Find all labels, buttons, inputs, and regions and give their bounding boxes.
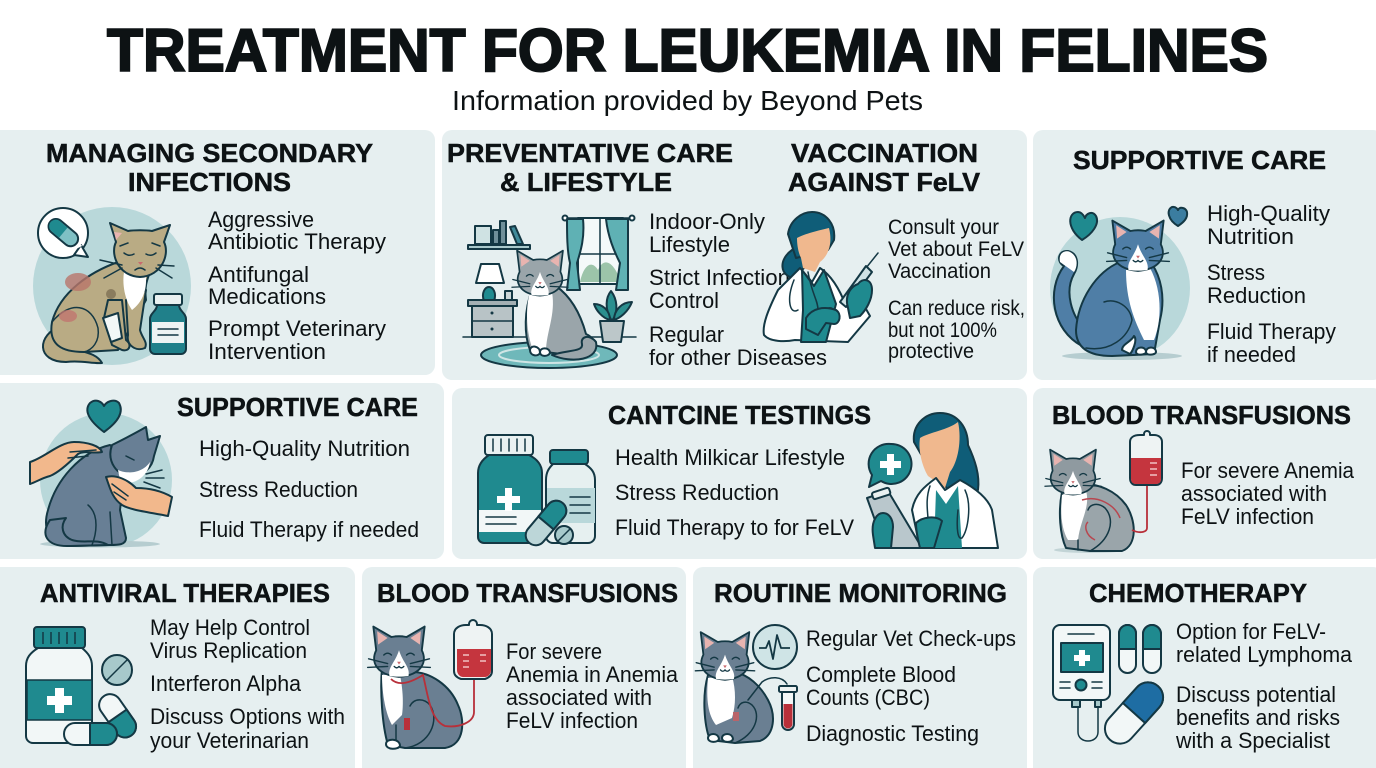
list: managing infection measures: Medications	[208, 284, 326, 309]
list: supportive care	[199, 436, 419, 542]
panel: antiviral therapies	[0, 567, 355, 768]
heading: managing secondary infections: MANAGING SECONDARY	[46, 138, 373, 168]
text: transfusion note: associated with	[506, 685, 652, 710]
illustration: indoor room with cat	[463, 216, 636, 368]
list: testing items: Fluid Therapy to for FeLV	[615, 515, 854, 540]
list: lifestyle measures: Strict Infection	[649, 265, 790, 290]
list: lifestyle measures: for other Diseases	[649, 345, 827, 370]
panel: routine monitoring	[693, 567, 1027, 768]
list: supportive care: High-Quality Nutrition	[199, 436, 410, 461]
heading: managing secondary infections: INFECTIONS	[128, 167, 291, 197]
panel: chemotherapy	[1033, 567, 1376, 768]
text: blood transfusion note: FeLV infection	[1181, 504, 1314, 529]
illustration: cat with monitor and test tube	[695, 625, 797, 743]
list: monitoring items: Diagnostic Testing	[806, 721, 979, 746]
list: antiviral notes: Discuss Options with	[150, 704, 345, 729]
illustration: cat with blood bag	[368, 620, 492, 749]
title: TREATMENT FOR LEUKEMIA IN FELINES	[107, 17, 1268, 84]
text: transfusion note: For severe	[506, 639, 602, 664]
list: managing infection measures: Antibiotic Therapy	[208, 229, 386, 254]
list: managing infection measures: Intervention	[208, 339, 326, 364]
heading: vaccination against FeLV: AGAINST FeLV	[788, 167, 981, 197]
list: chemotherapy notes: benefits and risks	[1176, 705, 1340, 730]
list: managing infection measures	[208, 207, 386, 364]
illustration: infusion pump and capsules	[1053, 625, 1169, 750]
list: chemotherapy notes: Discuss potential	[1176, 682, 1336, 707]
heading: chemotherapy: CHEMOTHERAPY	[1089, 578, 1307, 608]
list: testing items: Health Milkicar Lifestyle	[615, 445, 845, 470]
illustration: vet with syringe	[764, 212, 878, 342]
illustration: cat being petted	[30, 401, 172, 548]
list: monitoring items: Counts (CBC)	[806, 685, 930, 710]
list: monitoring items	[806, 626, 1016, 746]
list: chemotherapy notes: with a Specialist	[1175, 728, 1330, 753]
list: supportive care: High-Quality	[1207, 201, 1330, 226]
panel: cantcine testings	[452, 388, 1027, 559]
list: managing infection measures: Prompt Veterinary	[208, 316, 386, 341]
heading: routine monitoring: ROUTINE MONITORING	[714, 578, 1007, 608]
list: chemotherapy notes	[1175, 619, 1353, 753]
list: lifestyle measures	[649, 209, 827, 370]
list: managing infection measures: Antifungal	[208, 262, 309, 287]
list: lifestyle measures: Lifestyle	[649, 232, 730, 257]
subtitle: Information provided by Beyond Pets	[452, 85, 923, 116]
text: transfusion note	[506, 639, 679, 733]
list: supportive care: Nutrition	[1207, 224, 1294, 249]
panel: managing secondary infections	[0, 130, 435, 375]
list: supportive care: Reduction	[1207, 283, 1306, 308]
list: vaccination notes	[888, 216, 1025, 363]
list: supportive care: Stress	[1207, 260, 1265, 285]
text: blood transfusion note: associated with	[1181, 481, 1327, 506]
heading: vaccination against FeLV	[788, 138, 981, 197]
list: monitoring items: Regular Vet Check-ups	[806, 626, 1016, 651]
list: chemotherapy notes: Option for FeLV-	[1176, 619, 1326, 644]
list: supportive care: Stress Reduction	[199, 477, 358, 502]
list: lifestyle measures: Control	[649, 288, 719, 313]
list: supportive care	[1207, 201, 1336, 367]
list: supportive care: if needed	[1207, 342, 1296, 367]
list: vaccination notes: Vaccination	[888, 260, 991, 283]
heading: preventative care and lifestyle: & LIFESTYLE	[500, 167, 672, 197]
panel: blood transfusions bottom	[362, 567, 686, 768]
list: testing items: Stress Reduction	[615, 480, 779, 505]
heading: supportive care: SUPPORTIVE CARE	[1073, 145, 1326, 175]
list: vaccination notes: Can reduce risk,	[888, 297, 1025, 320]
list: antiviral notes: Interferon Alpha	[150, 671, 302, 696]
panel: supportive care middle	[0, 383, 444, 559]
list: chemotherapy notes: related Lymphoma	[1176, 642, 1353, 667]
heading: preventative care and lifestyle	[447, 138, 733, 197]
list: vaccination notes: Vet about FeLV	[888, 238, 1024, 261]
heading: managing secondary infections	[46, 138, 373, 197]
list: antiviral notes	[150, 615, 345, 753]
illustration: sick cat with medicine	[33, 207, 191, 365]
heading: preventative care and lifestyle: PREVENTATIVE CARE	[447, 138, 733, 168]
text: blood transfusion note: For severe Anemia	[1181, 458, 1355, 483]
list: supportive care: Fluid Therapy	[1207, 319, 1336, 344]
heading: supportive care: SUPPORTIVE CARE	[177, 392, 418, 422]
text: blood transfusion note	[1181, 458, 1355, 529]
heading: blood transfusions: BLOOD TRANSFUSIONS	[1052, 400, 1351, 430]
illustration: medicine bottles	[478, 435, 595, 549]
list: monitoring items: Complete Blood	[806, 662, 956, 687]
heading: vaccination against FeLV: VACCINATION	[791, 138, 978, 168]
illustration: happy cat with hearts	[1050, 207, 1190, 360]
panel: preventative care and vaccination	[442, 130, 1027, 380]
list: antiviral notes: May Help Control	[150, 615, 310, 640]
list: testing items	[615, 445, 854, 540]
text: transfusion note: FeLV infection	[506, 708, 638, 733]
list: antiviral notes: your Veterinarian	[150, 728, 309, 753]
list: antiviral notes: Virus Replication	[150, 638, 307, 663]
heading: cantcine testings: CANTCINE TESTINGS	[608, 400, 871, 430]
list: supportive care: Fluid Therapy if needed	[199, 517, 419, 542]
list: lifestyle measures: Regular	[649, 322, 724, 347]
panel: blood transfusions right	[1033, 388, 1376, 559]
list: vaccination notes: but not 100%	[888, 319, 997, 342]
heading: antiviral therapies: ANTIVIRAL THERAPIES	[40, 578, 330, 608]
text: transfusion note: Anemia in Anemia	[506, 662, 679, 687]
list: lifestyle measures: Indoor-Only	[649, 209, 765, 234]
illustration: cat with IV bag	[1045, 431, 1162, 553]
heading: blood transfusions: BLOOD TRANSFUSIONS	[377, 578, 678, 608]
illustration: antiviral pill bottle	[26, 627, 140, 745]
list: vaccination notes: protective	[888, 340, 974, 363]
list: vaccination notes: Consult your	[888, 216, 999, 239]
list: managing infection measures: Aggressive	[208, 207, 314, 232]
illustration: vet with clipboard	[867, 413, 998, 548]
panel: supportive care top	[1033, 130, 1376, 380]
